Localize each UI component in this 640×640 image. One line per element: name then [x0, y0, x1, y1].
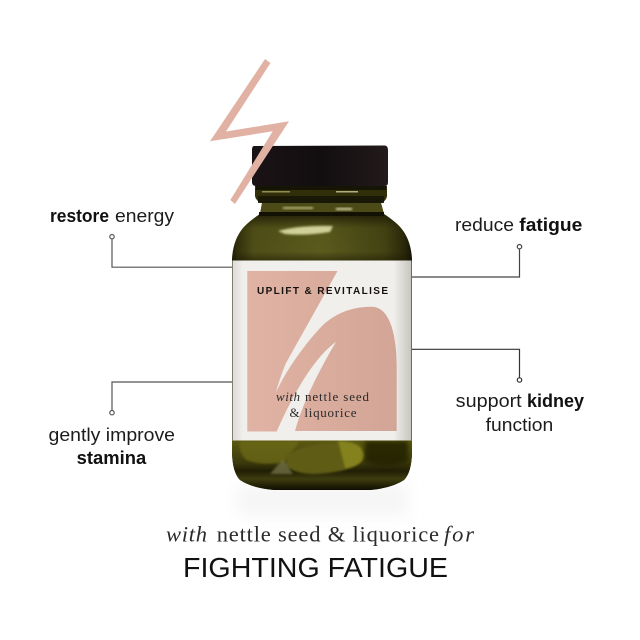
tagline: for [444, 522, 474, 547]
text: restore energy: energy [115, 206, 174, 226]
shoulder shading [232, 214, 412, 261]
capsules inside bottle [240, 441, 408, 474]
lightning bolt [210, 59, 289, 204]
label subtext line 2: & liquorice [290, 405, 357, 420]
tagline: with [166, 522, 207, 547]
neck collar [260, 203, 384, 214]
tagline: nettle seed & liquorice [217, 522, 439, 547]
text: support kidney function: function [486, 415, 553, 435]
text: support kidney function [456, 391, 584, 435]
connector: gently improve stamina [110, 382, 232, 415]
connector: restore energy [110, 234, 232, 267]
bottle glass [232, 186, 412, 490]
text: gently improve stamina [48, 425, 175, 468]
neck ring shading [255, 186, 387, 203]
label [232, 260, 412, 440]
label subtext line 1 [276, 389, 370, 404]
text: reduce fatigue: reduce [455, 215, 514, 235]
label subtext line 1: with [276, 389, 300, 404]
connector: support kidney function [412, 349, 522, 382]
text: restore energy [50, 206, 174, 226]
label heading: UPLIFT & REVITALISE [257, 286, 388, 297]
product bottle [232, 146, 412, 490]
heading: fighting fatigue: FIGHTING FATIGUE [183, 552, 448, 583]
pink artwork [247, 271, 397, 432]
glass highlights [278, 226, 333, 235]
connector: reduce fatigue [412, 244, 522, 277]
text: support kidney function: kidney [527, 391, 584, 411]
text: reduce fatigue [455, 215, 582, 235]
bottle shadow [238, 484, 408, 516]
text: gently improve stamina: gently improve [48, 425, 175, 445]
bottle lower section [232, 440, 412, 490]
text: gently improve stamina: stamina [77, 448, 147, 468]
text: support kidney function: support [456, 391, 522, 411]
cap [252, 146, 388, 186]
text: reduce fatigue: fatigue [519, 215, 582, 235]
text: restore energy: restore [50, 206, 109, 226]
label subtext line 1: nettle seed [305, 389, 370, 404]
